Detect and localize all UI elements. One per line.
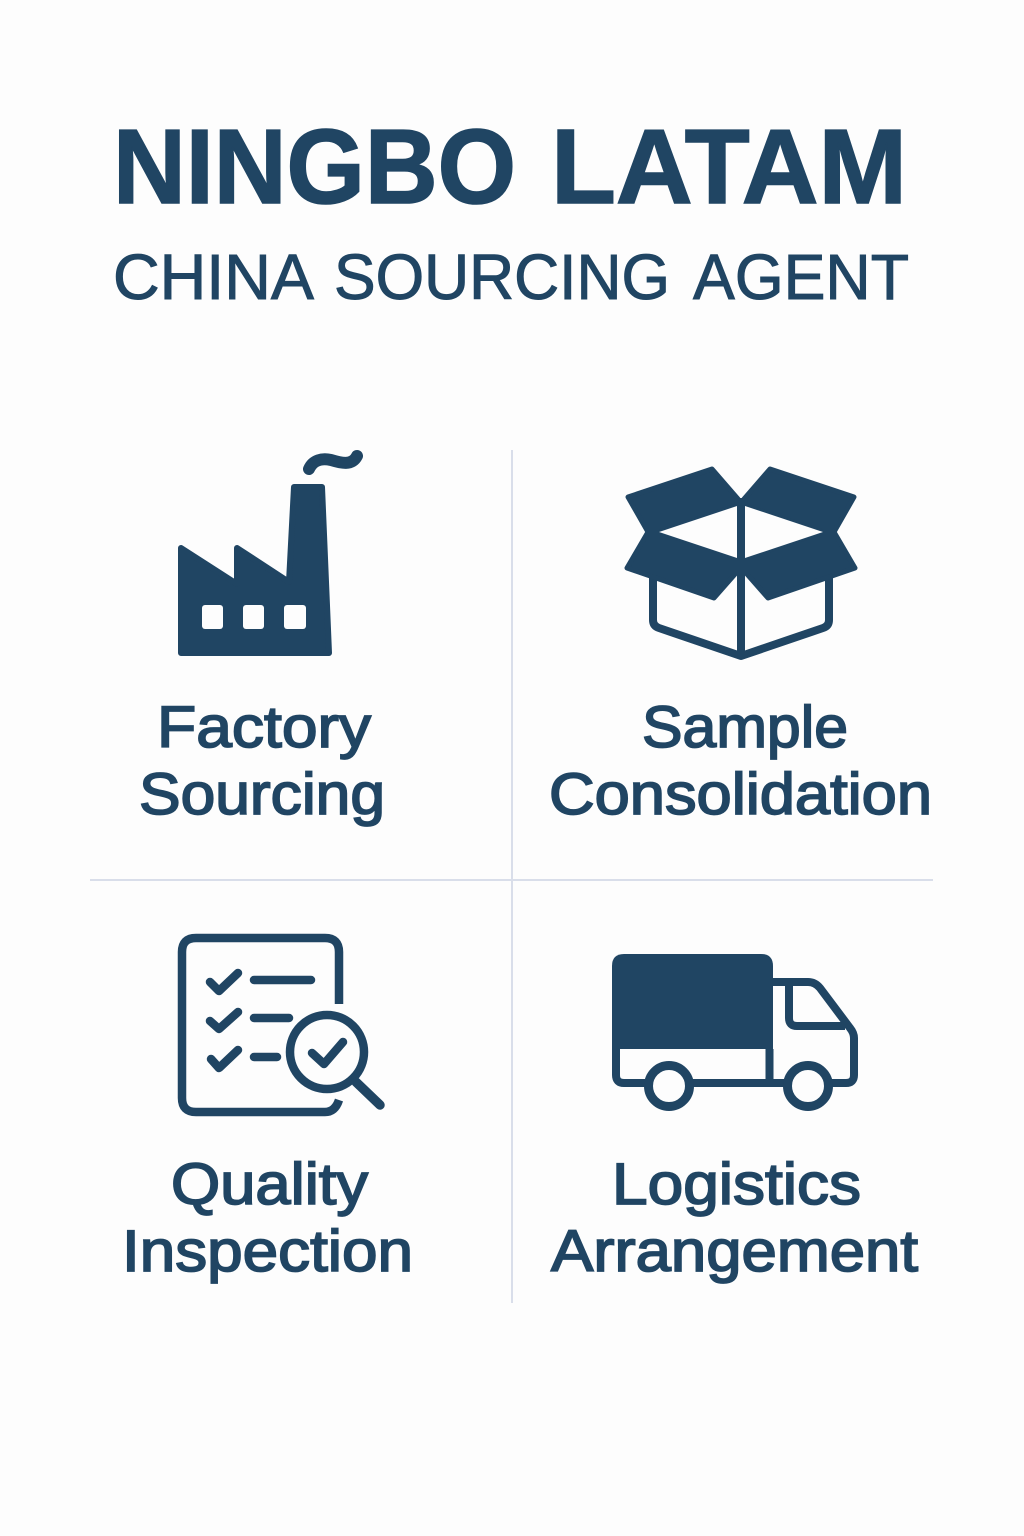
- label: logistics arrangement: Arrangement: [551, 1219, 918, 1284]
- icon: delivery truck: [612, 954, 854, 1106]
- panel: logistics arrangement: [551, 954, 918, 1284]
- label: factory sourcing: [139, 695, 385, 827]
- label: factory sourcing: Factory: [157, 695, 371, 760]
- label: factory sourcing: Sourcing: [139, 762, 385, 827]
- subtitle: CHINA: [113, 241, 314, 313]
- subtitle: AGENT: [693, 241, 909, 313]
- icon: checklist with magnifier: [182, 938, 380, 1112]
- label: quality inspection: [122, 1152, 413, 1284]
- label: quality inspection: Quality: [171, 1152, 368, 1217]
- label: logistics arrangement: [551, 1152, 918, 1284]
- panel: factory sourcing: [139, 456, 385, 827]
- label: quality inspection: Inspection: [122, 1219, 413, 1284]
- subtitle: [113, 241, 909, 313]
- title: [113, 108, 907, 226]
- label: sample consolidation: Sample: [642, 695, 848, 760]
- title: LATAM: [551, 108, 907, 226]
- panel: sample consolidation: [549, 469, 932, 827]
- label: logistics arrangement: Logistics: [612, 1152, 861, 1217]
- icon: factory: [181, 456, 357, 653]
- subtitle: SOURCING: [334, 241, 670, 313]
- panel: quality inspection: [122, 938, 413, 1284]
- label: sample consolidation: [549, 695, 932, 827]
- label: sample consolidation: Consolidation: [549, 762, 932, 827]
- icon: open box: [627, 469, 855, 656]
- title: NINGBO: [113, 108, 516, 226]
